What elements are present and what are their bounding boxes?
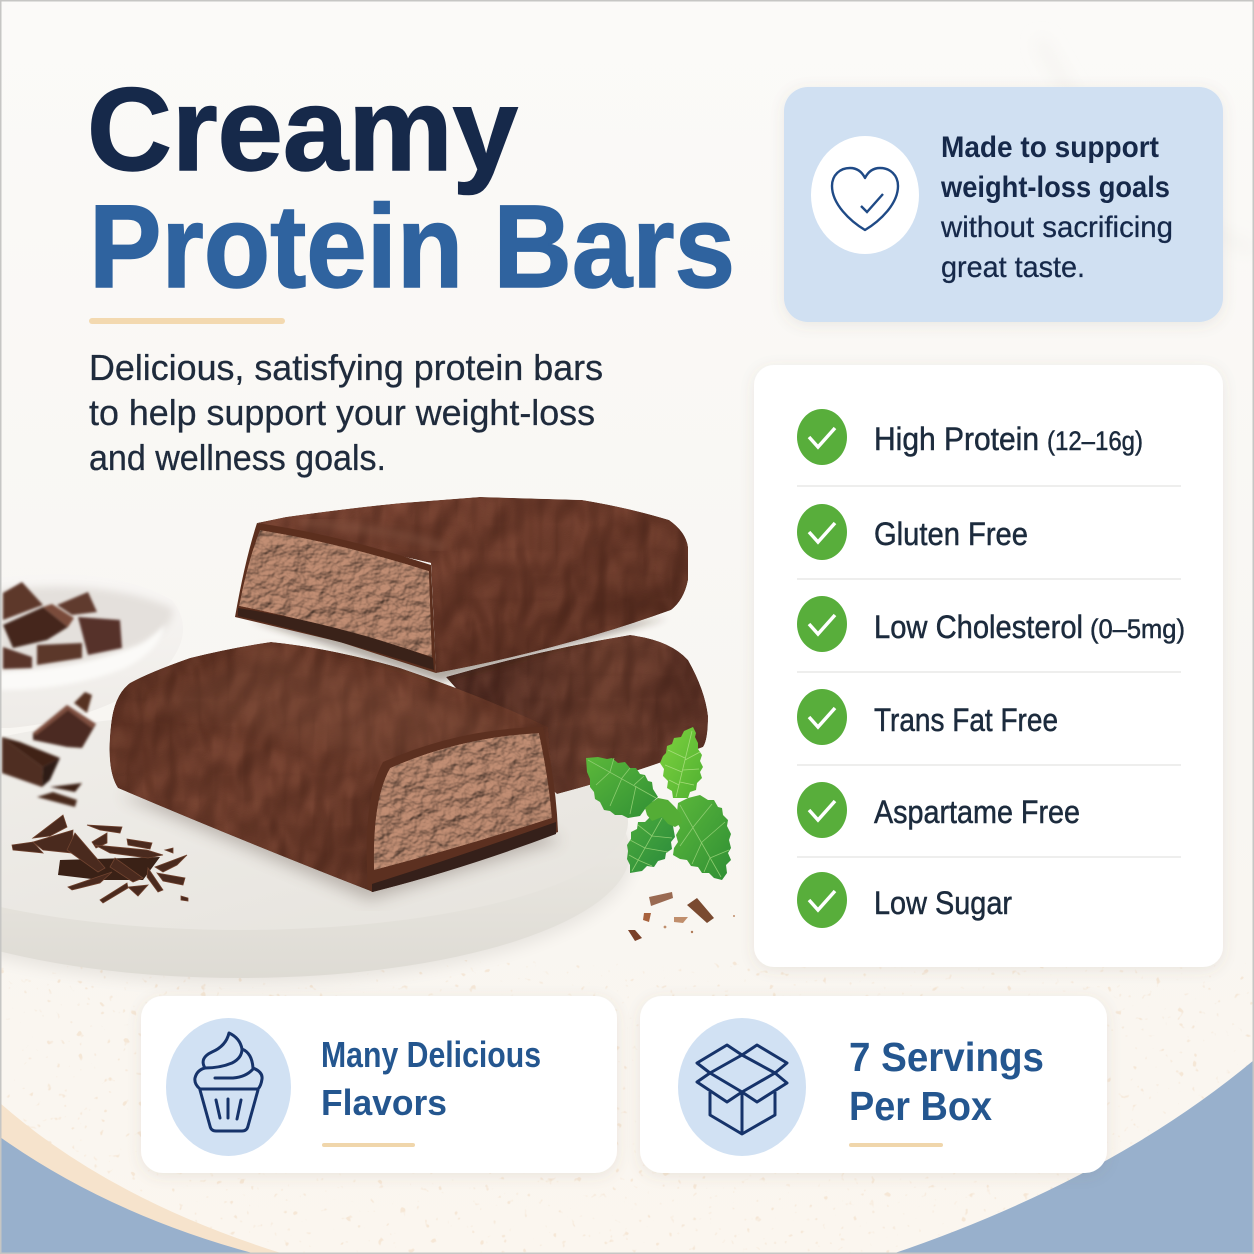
- bottom curved band: left blue: [0, 1137, 256, 1254]
- mint leaf: left: [586, 757, 658, 818]
- flavors text: [321, 1034, 541, 1123]
- bottom curved band: cream: [0, 1103, 284, 1254]
- icon: heart with check: [811, 136, 919, 254]
- benefit: high protein: High Protein: [874, 421, 1039, 457]
- flavors text: Many Delicious: [321, 1034, 541, 1075]
- title line: Creamy: Creamy: [87, 64, 518, 196]
- icon: cupcake: [166, 1018, 291, 1156]
- subtitle: to help support your weight-loss: [89, 392, 595, 433]
- servings underline: [849, 1143, 943, 1147]
- benefit: aspartame free: Aspartame Free: [874, 794, 1080, 830]
- servings text: 7 Servings: [849, 1034, 1044, 1080]
- callout text: [940, 131, 1173, 284]
- bowl of chocolate chunks: [0, 574, 183, 728]
- title line: Protein Bars: Protein Bars: [89, 181, 735, 313]
- chocolate crumbs: [628, 892, 735, 941]
- chocolate shavings: [12, 815, 188, 903]
- mint leaf: right: [673, 795, 731, 880]
- servings text: Per Box: [849, 1083, 992, 1129]
- mint leaf: lower: [627, 817, 675, 873]
- benefit: low cholesterol: [797, 596, 1185, 652]
- subtitle: [89, 347, 603, 478]
- callout text: without sacrificing: [940, 211, 1173, 244]
- mint leaf: center bud: [645, 798, 682, 827]
- benefit: low cholesterol: (0–5mg): [1090, 614, 1185, 644]
- servings text: [849, 1034, 1044, 1129]
- benefit: gluten free: [797, 504, 1028, 560]
- title: [87, 64, 735, 313]
- bottom curved band: right blue: [892, 1060, 1254, 1254]
- benefit: gluten free: Gluten Free: [874, 516, 1028, 552]
- subtitle: and wellness goals.: [89, 437, 386, 478]
- product photo illustration: [0, 497, 735, 984]
- subtitle: Delicious, satisfying protein bars: [89, 347, 603, 388]
- back chocolate bar: [446, 635, 708, 794]
- benefit: trans fat free: [797, 689, 1058, 745]
- flavors underline: [322, 1143, 415, 1147]
- benefit: aspartame free: [797, 782, 1080, 838]
- chocolate chunks on table: [2, 692, 96, 807]
- cut face of top bar: [235, 523, 436, 673]
- benefit: low cholesterol: Low Cholesterol: [874, 609, 1083, 645]
- panel: weight-loss callout: [784, 87, 1223, 322]
- title underline: [89, 318, 285, 324]
- panel: servings per box: [640, 996, 1107, 1173]
- callout text: weight-loss goals: [940, 171, 1170, 204]
- callout text: great taste.: [941, 251, 1085, 284]
- front chocolate bar: [110, 642, 562, 900]
- flavors text: Flavors: [321, 1082, 447, 1123]
- icon: open box: [678, 1018, 806, 1156]
- benefit: low sugar: [797, 872, 1012, 928]
- mint sprig: [586, 727, 731, 880]
- panel: many delicious flavors: [141, 996, 617, 1173]
- panel: benefits checklist: [754, 365, 1223, 967]
- mint leaf: top: [660, 727, 703, 798]
- callout text: Made to support: [941, 131, 1159, 164]
- benefit: high protein: [797, 409, 1143, 465]
- marble plate: [0, 714, 632, 984]
- benefit: high protein: (12–16g): [1047, 426, 1143, 456]
- cut face of front bar: [367, 727, 558, 892]
- benefit: trans fat free: Trans Fat Free: [874, 702, 1058, 738]
- top chocolate bar: [235, 497, 688, 682]
- benefit: low sugar: Low Sugar: [874, 885, 1012, 921]
